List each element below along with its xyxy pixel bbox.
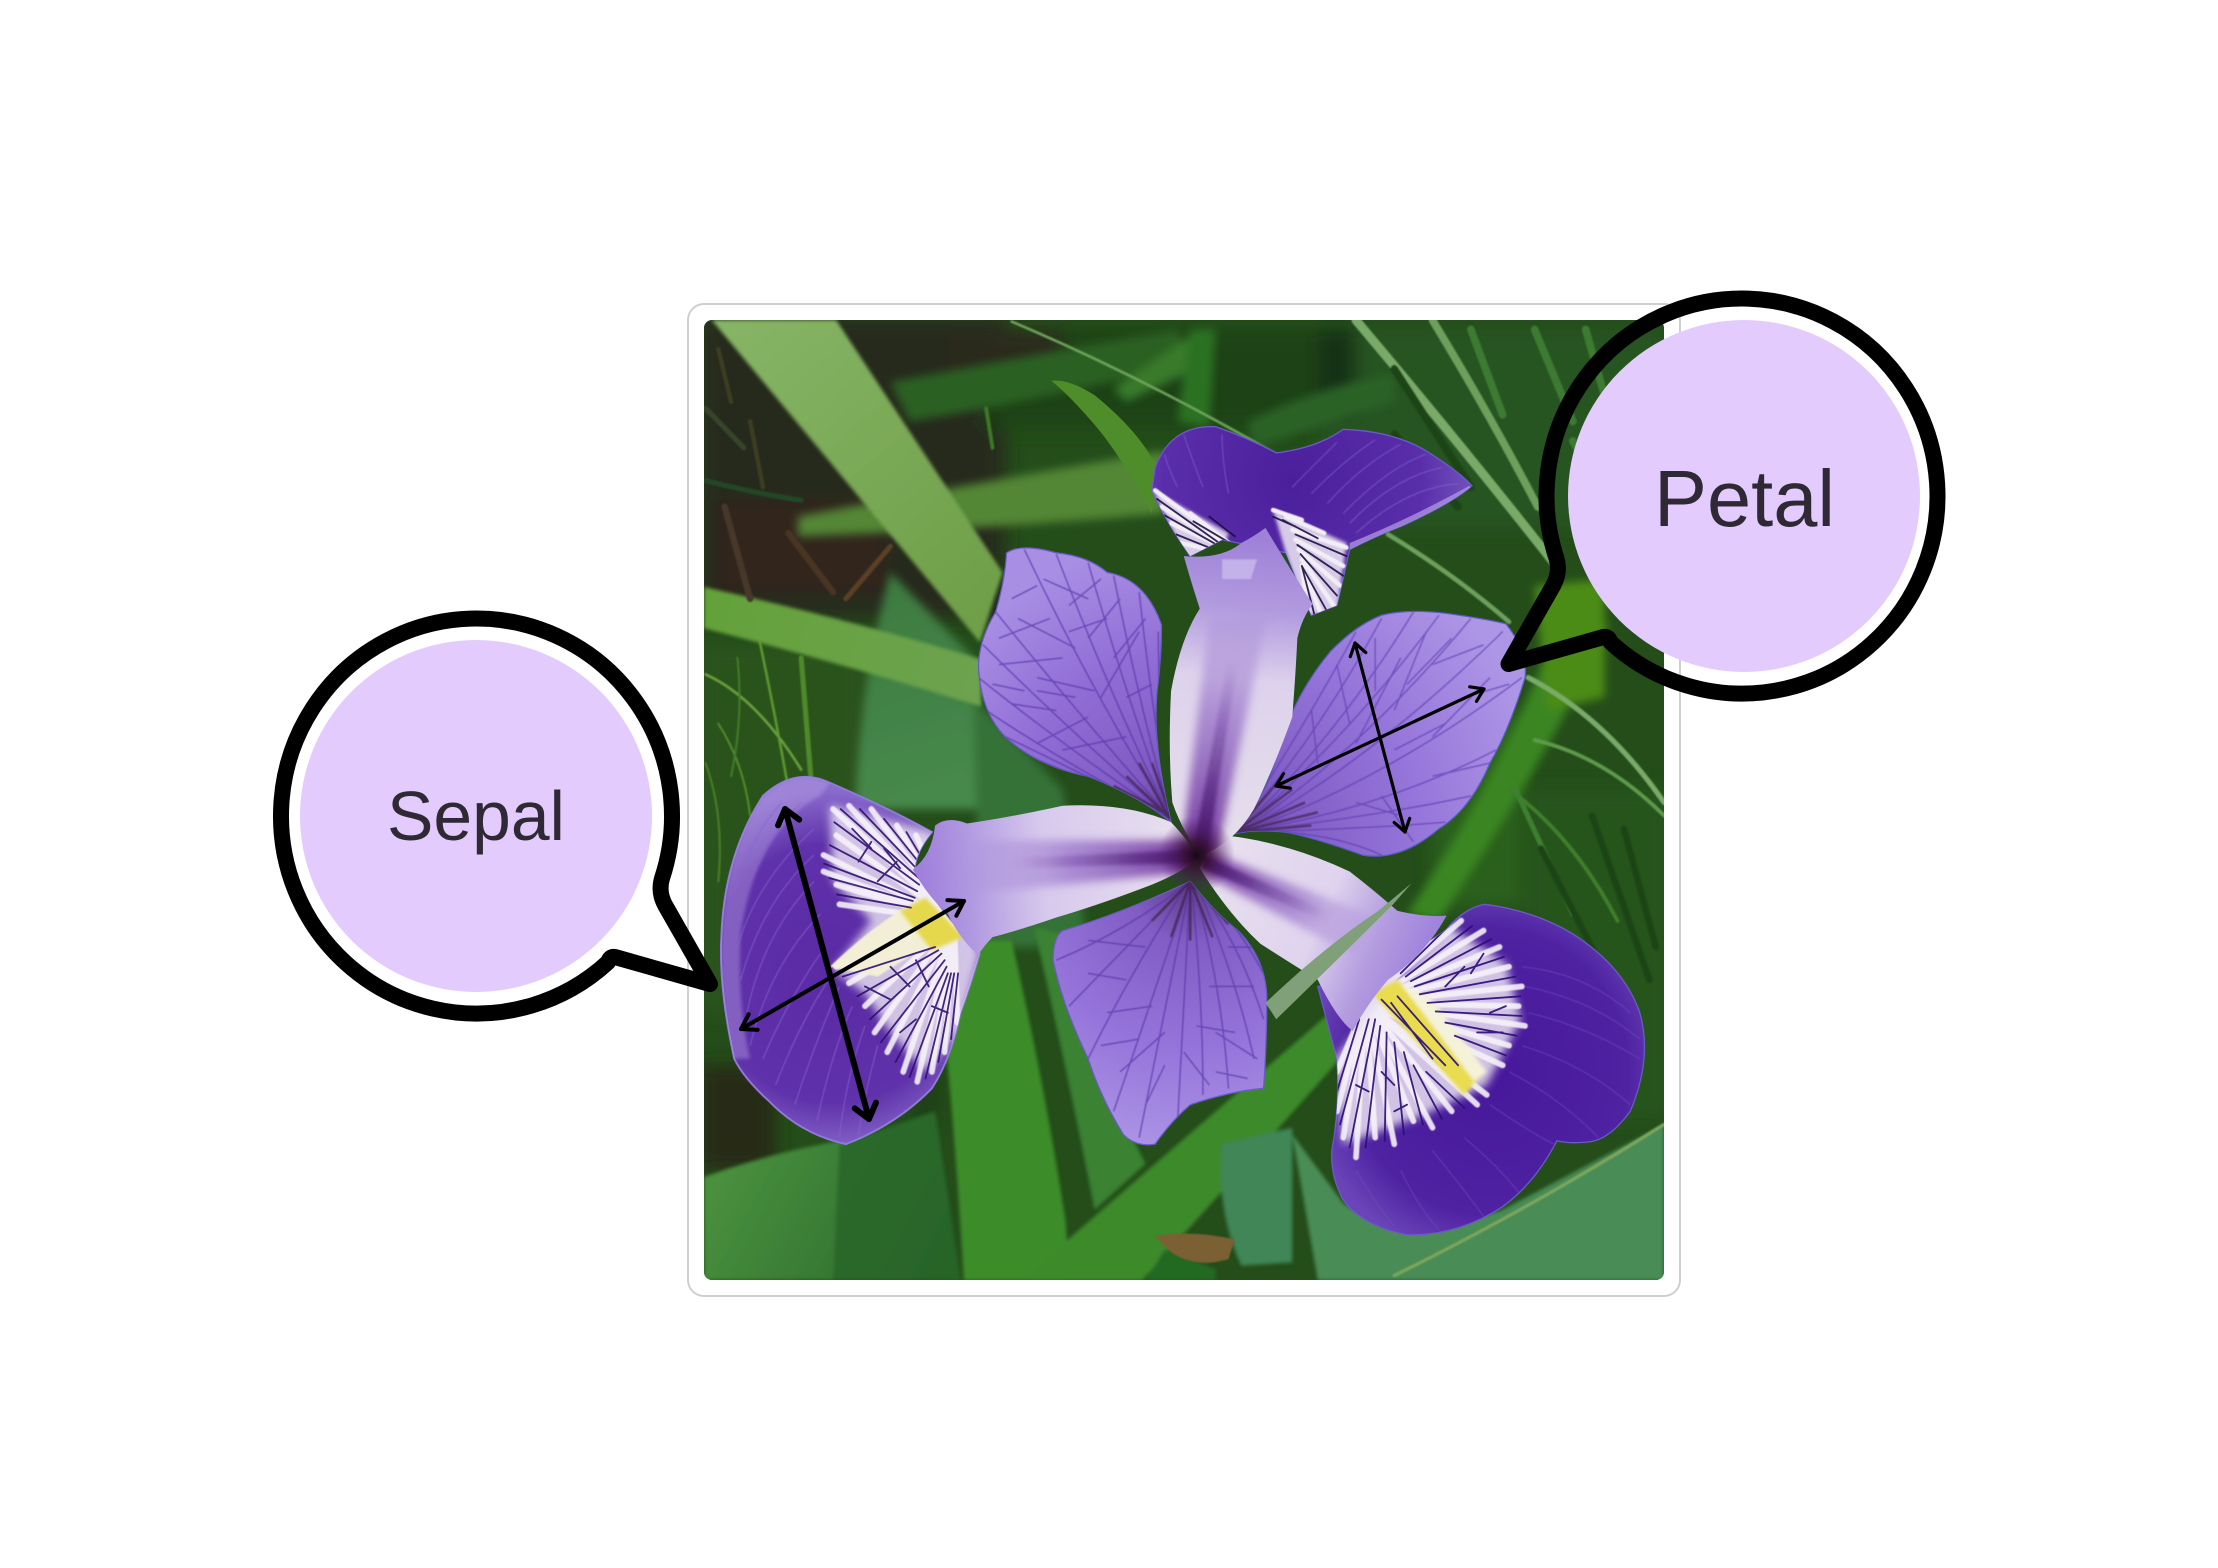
white streaks bbox=[823, 806, 957, 1082]
purple disc bbox=[300, 640, 652, 992]
callout: Petal bbox=[1508, 299, 1938, 694]
callout: Sepal bbox=[281, 619, 710, 1014]
arrows on petal bbox=[1276, 643, 1484, 832]
speech bubble outline bbox=[1508, 299, 1938, 694]
iris flower bbox=[721, 427, 1644, 1235]
sepal length arrow bbox=[785, 809, 869, 1119]
petal: bottom standard bbox=[1053, 881, 1267, 1145]
petal length arrow bbox=[1355, 643, 1405, 832]
style arm: upper bbox=[1170, 528, 1313, 858]
card frame bbox=[688, 304, 1680, 1296]
purple disc bbox=[1568, 320, 1920, 672]
curled leaf bbox=[1051, 380, 1157, 513]
sepal: top fall bbox=[1152, 427, 1472, 615]
sepal: bottom-right fall bbox=[1318, 904, 1644, 1235]
petal width arrow bbox=[1276, 689, 1484, 786]
soft white base bbox=[1336, 926, 1521, 1144]
dark veins on white bbox=[824, 809, 958, 1078]
petal: upper-left standard bbox=[978, 548, 1171, 822]
flower centre bbox=[1163, 820, 1234, 892]
label: Petal bbox=[1654, 454, 1835, 543]
photograph: iris flower bbox=[699, 316, 1669, 1282]
petal: right standard bbox=[1234, 611, 1525, 856]
iris anatomy infographic bbox=[272, 290, 1946, 1297]
style arm: left bbox=[913, 805, 1198, 955]
fine purple veins bbox=[734, 802, 878, 1138]
speech bubble outline bbox=[281, 619, 710, 1014]
grey-green blade over petal bbox=[1265, 883, 1412, 1019]
photo card bbox=[688, 304, 1680, 1296]
dry leaf bbox=[1155, 1233, 1235, 1263]
style arm: right-lower bbox=[1200, 835, 1447, 1031]
background foliage bbox=[699, 316, 1669, 1282]
arrows on sepal bbox=[741, 809, 964, 1119]
sepal width arrow bbox=[741, 901, 964, 1029]
sepal: left fall bbox=[721, 777, 980, 1144]
soft white base bbox=[830, 806, 980, 1072]
label: Sepal bbox=[387, 777, 565, 855]
